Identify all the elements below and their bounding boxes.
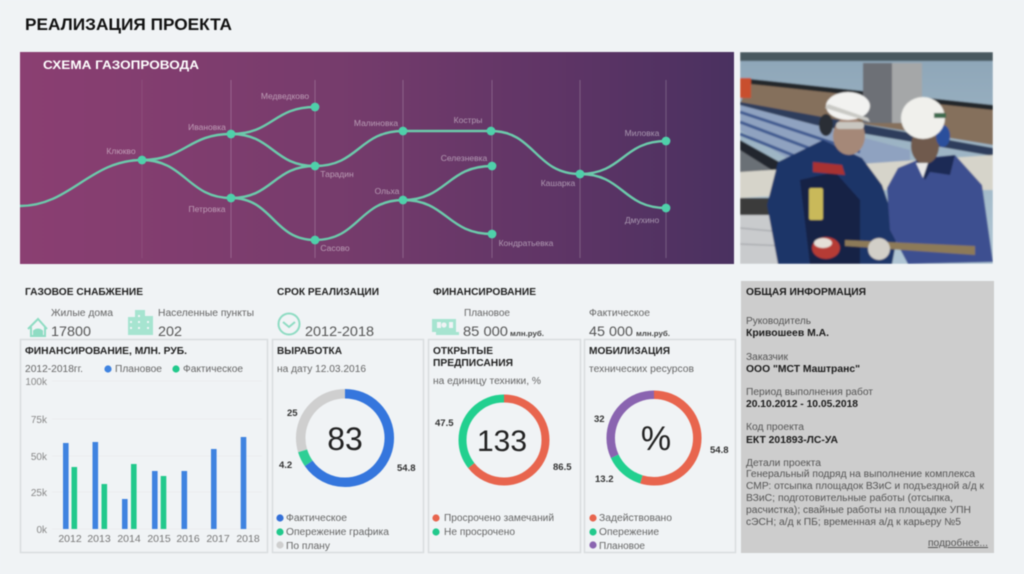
panel: mobilisation donut: технических ресурсов xyxy=(589,364,694,375)
worker left xyxy=(767,140,898,264)
y axis: 100k xyxy=(25,377,48,388)
planned bars xyxy=(63,437,246,529)
panel: general information: ОБЩАЯ ИНФОРМАЦИЯ xyxy=(746,287,866,298)
funding block: 45 000 xyxy=(589,323,633,339)
chart legend xyxy=(104,364,243,375)
panel: pipeline scheme xyxy=(20,52,734,264)
gas supply block: Населенные пункты xyxy=(158,308,254,319)
panel: mobilisation donut: 13.2 xyxy=(595,474,614,485)
legend: Просрочено замечаний xyxy=(444,513,554,524)
panel: output donut: 4.2 xyxy=(279,460,292,471)
funding block: млн.руб. xyxy=(510,330,544,338)
funding block: Плановое xyxy=(464,308,510,319)
panel: general information xyxy=(741,281,994,553)
panel: open orders donut: ПРЕДПИСАНИЯ xyxy=(433,358,513,369)
x axis: 2013 xyxy=(87,533,111,545)
panel: mobilisation donut xyxy=(584,340,736,552)
icon: house xyxy=(28,319,47,336)
station labels: Кашарка xyxy=(541,178,576,188)
station labels: Сасово xyxy=(320,243,350,253)
panel: general information: Код проекта xyxy=(746,422,804,433)
icon: buildings xyxy=(128,310,153,335)
station labels: Миловка xyxy=(625,128,660,138)
panel: general information: расчистка); свайные работы на площадке УПН xyxy=(746,504,971,516)
panel: funding bar chart: 2012-2018гг. xyxy=(25,364,83,375)
panel: funding bar chart xyxy=(20,340,268,552)
station labels xyxy=(106,91,660,253)
legend xyxy=(589,513,672,552)
worker right xyxy=(887,155,993,264)
panel: mobilisation donut: % xyxy=(641,420,671,458)
funding block: Фактическое xyxy=(589,308,650,319)
legend: Плановое xyxy=(599,541,645,552)
panel: general information: Кривошеев М.А. xyxy=(746,328,829,339)
gas supply block: 17800 xyxy=(51,323,91,339)
legend xyxy=(432,513,554,538)
y axis: 0k xyxy=(36,525,48,536)
panel: general information: Детали проекта xyxy=(746,458,821,469)
panel: general information: ВЗиС; подготовительные работы (отсыпка, xyxy=(746,492,953,504)
panel: mobilisation donut: 54.8 xyxy=(710,445,728,456)
panel: open orders donut: 133 xyxy=(477,425,527,458)
station labels: Ивановка xyxy=(188,122,226,132)
panel: output donut: 54.8 xyxy=(397,463,416,474)
icon: banknotes xyxy=(432,319,459,335)
x axis: 2018 xyxy=(236,533,260,545)
chart legend: Фактическое xyxy=(183,364,243,375)
tool and gloves xyxy=(845,240,975,255)
panel: output donut: ВЫРАБОТКА xyxy=(277,346,342,357)
gas supply block: ГАЗОВОЕ СНАБЖЕНИЕ xyxy=(25,287,143,298)
donut chart xyxy=(611,395,697,481)
panel: general information: Генеральный подряд на выполнение комплекса xyxy=(746,469,975,480)
legend: Фактическое xyxy=(286,513,347,524)
panel: general information: ЕКТ 201893-ЛС-УА xyxy=(746,435,838,446)
panel: output donut: 25 xyxy=(287,408,298,419)
y axis: 25k xyxy=(31,488,48,499)
panel: mobilisation donut: 32 xyxy=(594,414,605,425)
panel: open orders donut xyxy=(428,340,580,552)
panel: general information: Период выполнения работ xyxy=(746,386,873,398)
panel: mobilisation donut: МОБИЛИЗАЦИЯ xyxy=(589,346,670,357)
legend: По плану xyxy=(286,541,330,552)
panel: open orders donut: ОТКРЫТЫЕ xyxy=(433,346,493,357)
panel: output donut xyxy=(272,340,424,552)
x axis: 2012 xyxy=(58,533,82,545)
legend: Опережение графика xyxy=(286,526,389,538)
gas supply block: 202 xyxy=(158,323,182,339)
chart legend: Плановое xyxy=(115,364,162,375)
actual bars xyxy=(72,464,166,529)
station labels: Дмухино xyxy=(625,215,659,225)
funding block: ФИНАНСИРОВАНИЕ xyxy=(433,287,536,298)
gas supply block: Жилые дома xyxy=(51,308,113,319)
donut chart xyxy=(301,394,389,482)
panel: general information: подробнее... xyxy=(928,537,988,549)
timeline block: 2012-2018 xyxy=(305,323,374,339)
station labels: Кондратьевка xyxy=(499,238,554,248)
panel: general information: сЭСН; а/д к ПБ; временная а/д к карьеру №5 xyxy=(746,517,961,528)
photo: workers at pipeline xyxy=(740,52,993,264)
legend: Не просрочено xyxy=(444,527,515,538)
funding block: 85 000 xyxy=(463,323,508,339)
legend: Опережение xyxy=(599,527,659,538)
timeline block xyxy=(277,287,379,339)
station labels: Ольха xyxy=(375,186,400,196)
funding block: млн.руб. xyxy=(636,330,670,338)
timeline block: СРОК РЕАЛИЗАЦИИ xyxy=(277,287,379,298)
panel: funding bar chart: ФИНАНСИРОВАНИЕ, МЛН. РУБ. xyxy=(25,346,187,357)
station labels: Костры xyxy=(454,115,482,125)
panel: open orders donut: 86.5 xyxy=(553,462,572,473)
y axis: 75k xyxy=(31,415,48,426)
station labels: Медведково xyxy=(261,91,309,101)
gas supply block xyxy=(25,287,254,339)
legend xyxy=(276,513,389,552)
panel: general information: Заказчик xyxy=(746,352,789,363)
pipeline nodes xyxy=(138,103,670,244)
panel: general information: Руководитель xyxy=(746,316,811,327)
donut chart xyxy=(462,398,546,482)
panel: output donut: 83 xyxy=(327,421,363,457)
panel: general information: 20.10.2012 - 10.05.2018 xyxy=(746,399,858,410)
station labels: Тарадин xyxy=(320,169,354,179)
pipeline routes xyxy=(20,107,666,240)
icon: clock xyxy=(278,314,300,334)
panel: general information: СМР: отсыпка площадок ВЗиС и подъездной а/д к xyxy=(746,481,985,492)
x axis xyxy=(58,533,260,545)
panel: open orders donut: 47.5 xyxy=(435,418,454,429)
station labels: Селезневка xyxy=(441,153,488,163)
x axis: 2014 xyxy=(117,533,141,545)
panel: open orders donut: на единицу техники, % xyxy=(433,376,541,387)
x axis: 2016 xyxy=(176,533,200,545)
station labels: Клюкво xyxy=(106,146,136,156)
station labels: Петровка xyxy=(188,204,226,214)
scheme heading: СХЕМА ГАЗОПРОВОДА xyxy=(43,58,199,72)
panel: general information: ООО "МСТ Маштранс" xyxy=(746,364,860,375)
title: РЕАЛИЗАЦИЯ ПРОЕКТА xyxy=(25,15,232,34)
station labels: Малиновка xyxy=(354,118,398,128)
funding block xyxy=(432,287,670,339)
x axis: 2015 xyxy=(147,533,171,545)
panel: output donut: на дату 12.03.2016 xyxy=(277,364,366,375)
x axis: 2017 xyxy=(206,533,230,545)
legend: Задействовано xyxy=(599,513,672,524)
y axis xyxy=(25,377,48,536)
y axis: 50k xyxy=(31,452,48,463)
